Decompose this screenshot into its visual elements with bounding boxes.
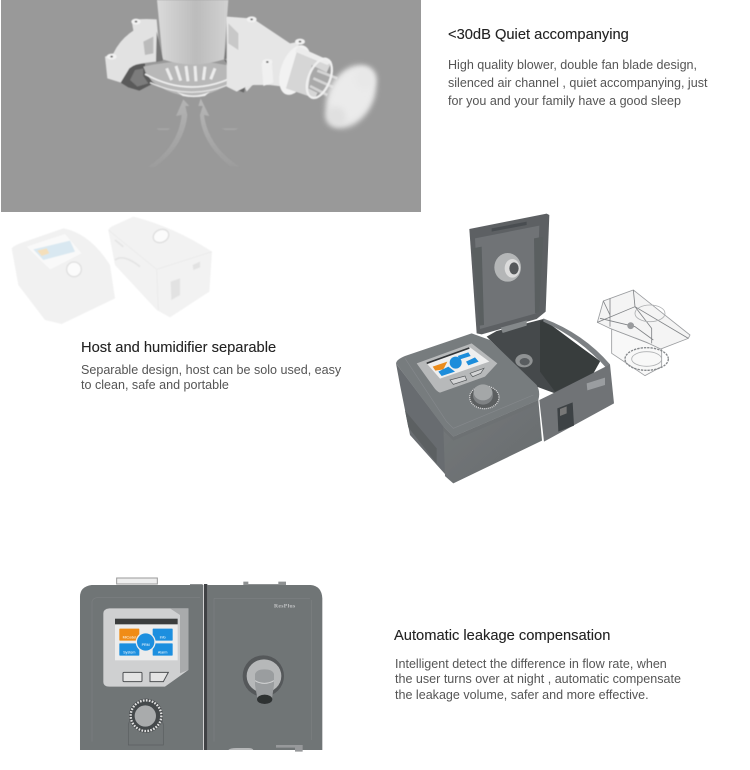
image: front view of device: [80, 578, 322, 752]
top rim: [443, 400, 538, 441]
screen: [426, 347, 489, 379]
dark cut wall right: [224, 59, 247, 93]
tank lid: [597, 290, 690, 349]
screen tiles: [119, 629, 173, 656]
divider: [204, 584, 207, 750]
icon: blower outlet: [227, 16, 338, 101]
text: quiet description: High quality blower, double fan blade design,: [448, 58, 697, 72]
collar tube: [286, 47, 332, 98]
text: quiet description: for you and your family have a good sleep: [448, 94, 681, 108]
text: quiet description: silenced air channel , quiet accompanying, just: [448, 76, 708, 90]
screen tiles: System: [123, 650, 135, 654]
impeller blades: [167, 66, 215, 81]
screen tiles: [433, 362, 447, 371]
icon: blower core: [105, 0, 260, 97]
text: leakage description: the leakage volume, safer and more effective.: [395, 688, 649, 702]
humidifier latch and window: [587, 378, 605, 390]
brand: ResPlus: [274, 604, 296, 610]
faded humidifier: [108, 217, 212, 317]
flange: [273, 41, 317, 99]
humidifier rim: [543, 318, 610, 368]
text: separable description: to clean, safe and portable: [81, 378, 229, 392]
image: open device lid and humidifier: [469, 214, 614, 442]
fins: [308, 65, 338, 97]
arrows: air intake: [148, 98, 239, 167]
humidifier body: [207, 585, 322, 750]
text: leakage description: the user turns over at night , automatic compensate: [395, 672, 681, 686]
screen: [115, 619, 178, 660]
dial: [128, 717, 163, 745]
left housing: [105, 19, 163, 83]
heading: separable: Host and humidifier separable: [81, 340, 276, 356]
heading: leakage: Automatic leakage compensation: [394, 628, 610, 644]
humidifier front: [539, 364, 614, 442]
body inset lines: [92, 598, 312, 742]
host side: [396, 363, 453, 483]
image: transparent water tank: [597, 290, 690, 376]
faded host: [12, 228, 115, 324]
buttons: [123, 672, 142, 682]
heading: quiet: <30dB Quiet accompanying: [448, 27, 629, 43]
right housing: [227, 17, 260, 92]
image: faded host and humidifier: [12, 217, 212, 324]
icon: steam cloud: [316, 57, 386, 136]
bottom details: [228, 748, 253, 750]
outlet duct: [227, 17, 300, 92]
hinges: [501, 320, 527, 333]
panel: blower illustration: [1, 0, 421, 212]
screen bezel: [103, 608, 188, 687]
screen tiles: PRM: [142, 643, 150, 647]
screen tiles: Alarm: [158, 650, 167, 654]
collar ring: [302, 55, 337, 101]
bezel: [417, 343, 497, 393]
top boss: [247, 16, 257, 22]
bottom ring: [625, 348, 668, 370]
screen tiles: MiCodel: [123, 635, 136, 639]
lid circle: [635, 305, 665, 322]
humidifier interior: [487, 319, 600, 393]
side boss: [262, 59, 273, 86]
host front: [443, 400, 542, 483]
panel background: [1, 0, 421, 212]
buttons: [450, 376, 467, 384]
text: separable description: Separable design, host can be solo used, easy: [81, 363, 342, 377]
image: host unit: [396, 333, 542, 483]
screen tiles: Info: [160, 635, 166, 639]
central column: [157, 0, 228, 64]
impeller bowl: [143, 61, 240, 96]
lid: [469, 214, 549, 334]
tank body: [610, 327, 662, 376]
text: leakage description: Intelligent detect the difference in flow rate, when: [395, 657, 667, 671]
screw bosses left: [131, 19, 141, 25]
host top: [396, 333, 539, 437]
dial: [470, 386, 499, 409]
lid port: [494, 253, 521, 282]
air outlet: [243, 655, 284, 697]
dark cut wall left: [121, 63, 153, 91]
host body: [80, 585, 203, 750]
top handle: [117, 578, 157, 584]
